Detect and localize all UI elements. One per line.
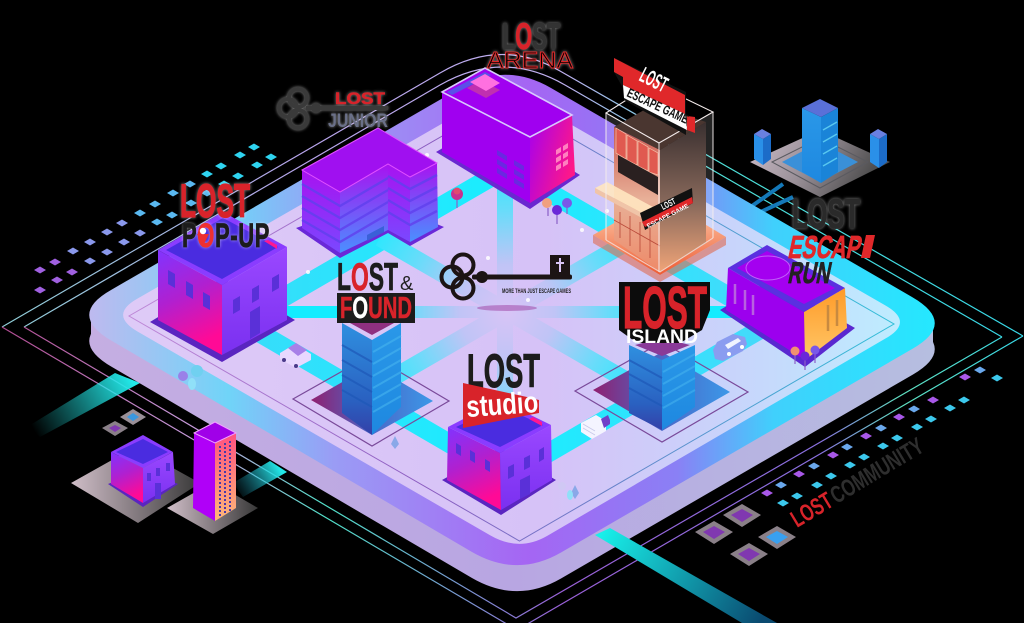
logo: Lost Escape Run [786,190,875,290]
building: Lost Escape Run [720,245,855,367]
blue tower complex top-right [750,99,890,197]
building: Lost and Found tower [293,323,449,446]
logo: Lost Studio [463,344,540,428]
truck [581,415,610,439]
building: Lost Pop-Up [150,212,295,362]
small building bottom-left [71,435,200,523]
logo: Lost and Found [337,256,415,325]
logo: Lost Escape Run: RUN [786,257,834,290]
bottom cyan strip [595,528,777,623]
logo: small Escape Game sign [640,188,693,230]
building: Lost Escape Game [593,83,726,282]
label: Lost Community [786,433,929,533]
logo: Lost Arena: ARENA [487,47,574,73]
logo: Lost Junior: LOST [335,89,386,108]
logo: Lost and Found: FOUND [340,290,412,325]
upper-left dot field [34,144,277,294]
logo: Lost Junior [279,89,388,132]
building: Lost Arena [436,68,580,209]
logo: Lost and Found: LOST [337,256,398,299]
trees and pins [178,188,820,500]
logo: small Escape Game sign: ESCAPE GAME [646,204,690,230]
logo: Lost Escape Game sign: LOST [636,62,672,97]
building: Lost Junior [296,128,444,258]
label: Lost Community: LOST [786,487,838,533]
logo: Lost Island: LOST [623,275,707,341]
logo: Lost Arena: LOST [502,16,560,57]
logo: Lost Pop-Up [180,174,270,255]
logo: Lost Studio: LOST [467,344,540,397]
car: left road [280,343,311,368]
logo: key with tagline: MORE THAN JUST ESCAPE GAMES [502,289,571,295]
logo: Lost Escape Run: LOST [792,190,860,237]
logo: Lost Junior: JUNIOR [328,111,388,132]
logo: Lost Pop-Up: LOST [180,174,250,227]
platform [89,75,935,591]
logo: Lost Escape Game sign: ESCAPE GAME [625,85,691,127]
logo: Lost and Found: & [400,273,414,295]
chip tiles bottom-right [695,504,796,566]
logo: Lost Escape Run: ESCAP [786,229,865,265]
cyan light strips [27,184,793,497]
lower-right dot field [761,366,1003,506]
logo: Lost Escape Game sign [614,58,695,135]
logo: Lost Pop-Up: POP-UP [182,217,270,255]
logo: Lost Island: ISLAND [626,327,698,348]
car: right road [713,334,747,361]
tower bottom-left [167,422,258,534]
logo: Lost Arena [487,16,574,73]
logo: Lost Studio: studio [465,386,539,424]
logo: small Escape Game sign: LOST [659,196,678,212]
logo: Lost Island [619,275,710,348]
small tiles bottom-left [102,409,146,436]
logo: key with tagline [442,254,572,298]
building: Lost Island tower [575,338,748,442]
label: Lost Community: COMMUNITY [826,433,929,509]
building: Lost Studio [442,400,556,515]
